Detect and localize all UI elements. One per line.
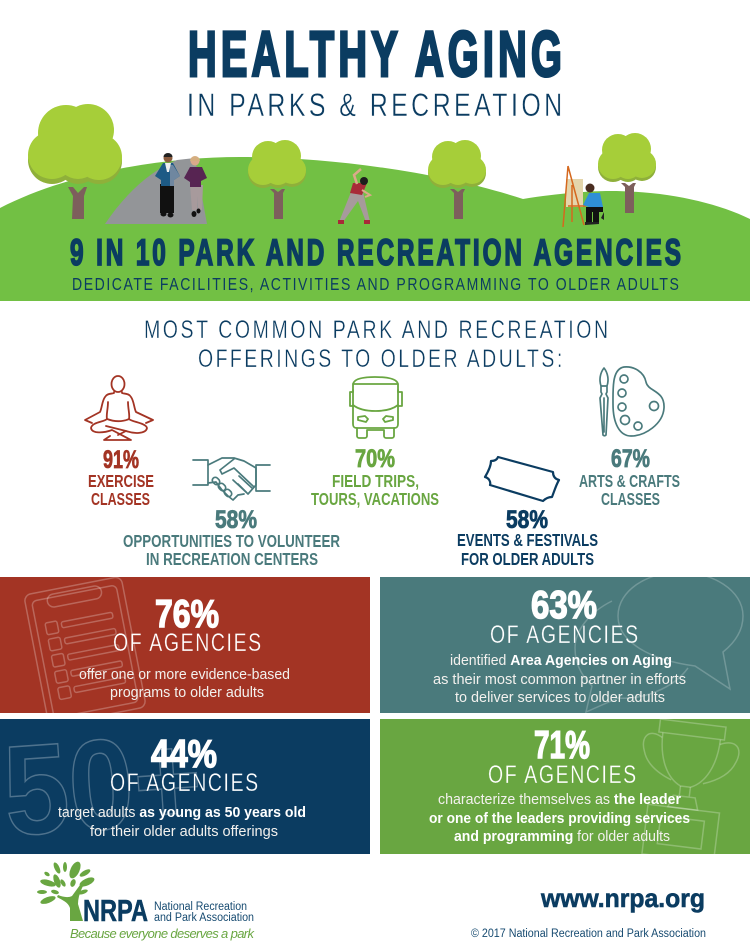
offering: volunteer: IN RECREATION CENTERS (146, 549, 318, 569)
offering: arts and crafts: CLASSES (601, 489, 660, 509)
offering: field trips: FIELD TRIPS, (332, 471, 419, 491)
panel text: for their older adults offerings (90, 823, 278, 840)
offering: exercise classes (85, 376, 154, 509)
offering: volunteer: OPPORTUNITIES TO VOLUNTEER (123, 531, 340, 551)
panel text (433, 584, 686, 706)
section heading (144, 316, 608, 373)
offering: exercise classes: CLASSES (91, 489, 150, 509)
offering: field trips (311, 377, 439, 509)
website and copyright: © 2017 National Recreation and Park Association (471, 928, 706, 940)
panel: 71% leader in services (380, 717, 750, 864)
title (187, 20, 562, 124)
tree 4 (598, 133, 656, 213)
panel: 63% area agencies on aging (380, 572, 750, 713)
icon: ghost speech bubbles (575, 572, 743, 712)
walking path (105, 158, 207, 224)
panel text: 63% (531, 584, 597, 627)
panel text: 71% (534, 724, 590, 767)
panel text: to deliver services to older adults (455, 689, 665, 706)
icon: ghost trophy (641, 719, 740, 854)
panel text: OF AGENCIES (110, 769, 258, 797)
logo: NRPA: National Recreation (154, 901, 247, 913)
tree 3 (428, 140, 486, 219)
stat: 91% (103, 446, 139, 474)
website and copyright: www.nrpa.org (540, 883, 705, 913)
section heading: OFFERINGS TO OLDER ADULTS: (198, 345, 562, 373)
panel text: OF AGENCIES (490, 621, 638, 649)
stat: 67% (611, 445, 650, 473)
stretching woman (338, 169, 370, 224)
banner headline: 9 IN 10 PARK AND RECREATION AGENCIES (70, 231, 681, 273)
green hill (0, 157, 750, 301)
icon: ticket (485, 457, 559, 501)
walker: man (155, 153, 180, 218)
offering: arts and crafts (579, 367, 680, 509)
panel text: OF AGENCIES (488, 761, 636, 789)
panel text: programs to older adults (110, 684, 264, 701)
tree 1 (28, 104, 122, 219)
panel text (79, 593, 290, 701)
walker: woman (184, 156, 207, 217)
icon: palette and brush (600, 367, 664, 436)
icon: bus (350, 377, 402, 438)
icon: meditating figure (85, 376, 153, 440)
panel text: identified Area Agencies on Aging (450, 652, 672, 669)
stat: 70% (355, 445, 395, 473)
tree 2 (248, 140, 306, 219)
wordmark: NRPA (83, 893, 148, 928)
offering: field trips: TOURS, VACATIONS (311, 489, 439, 509)
panel text (58, 733, 306, 840)
offering: events and festivals: EVENTS & FESTIVALS (457, 530, 598, 550)
panel: 44% adults as young as 50 (0, 719, 370, 854)
illustration: park landscape (0, 104, 750, 301)
offering: arts and crafts: ARTS & CRAFTS (579, 471, 680, 491)
offering: volunteer (123, 458, 340, 569)
panel text: 44% (151, 733, 217, 776)
title: HEALTHY AGING (188, 20, 562, 90)
tagline: Because everyone deserves a park (70, 926, 256, 941)
logo: NRPA: and Park Association (154, 912, 254, 924)
panel text: or one of the leaders providing services (429, 810, 690, 827)
banner headline (70, 231, 681, 294)
icon: handshake (193, 458, 270, 500)
icon: ghost clipboard (24, 576, 146, 726)
icon: tree of leaves (37, 860, 96, 921)
stat: 58% (506, 506, 548, 534)
section heading: MOST COMMON PARK AND RECREATION (144, 316, 608, 344)
panel text: offer one or more evidence-based (79, 666, 290, 683)
panel text: characterize themselves as the leader (438, 791, 681, 808)
panel text: as their most common partner in efforts (433, 671, 686, 688)
banner headline: DEDICATE FACILITIES, ACTIVITIES AND PROGRAMMING TO OLDER ADULTS (72, 274, 679, 294)
title: IN PARKS & RECREATION (187, 88, 562, 124)
stat: 58% (215, 506, 257, 534)
offering: exercise classes: EXERCISE (88, 471, 154, 491)
panel text: target adults as young as 50 years old (58, 804, 306, 821)
website and copyright (471, 883, 706, 940)
panel text (429, 724, 690, 845)
panel: 76% evidence-based programs (0, 576, 370, 726)
logo: NRPA (37, 860, 256, 941)
painter at easel (563, 166, 604, 227)
icon: ghost 50+: 50+ (0, 707, 206, 863)
offering: events and festivals: FOR OLDER ADULTS (461, 549, 594, 569)
panel text: OF AGENCIES (113, 629, 261, 657)
offering: events and festivals (457, 457, 598, 569)
panel text: and programming for older adults (454, 828, 670, 845)
panel text: 76% (155, 593, 219, 636)
